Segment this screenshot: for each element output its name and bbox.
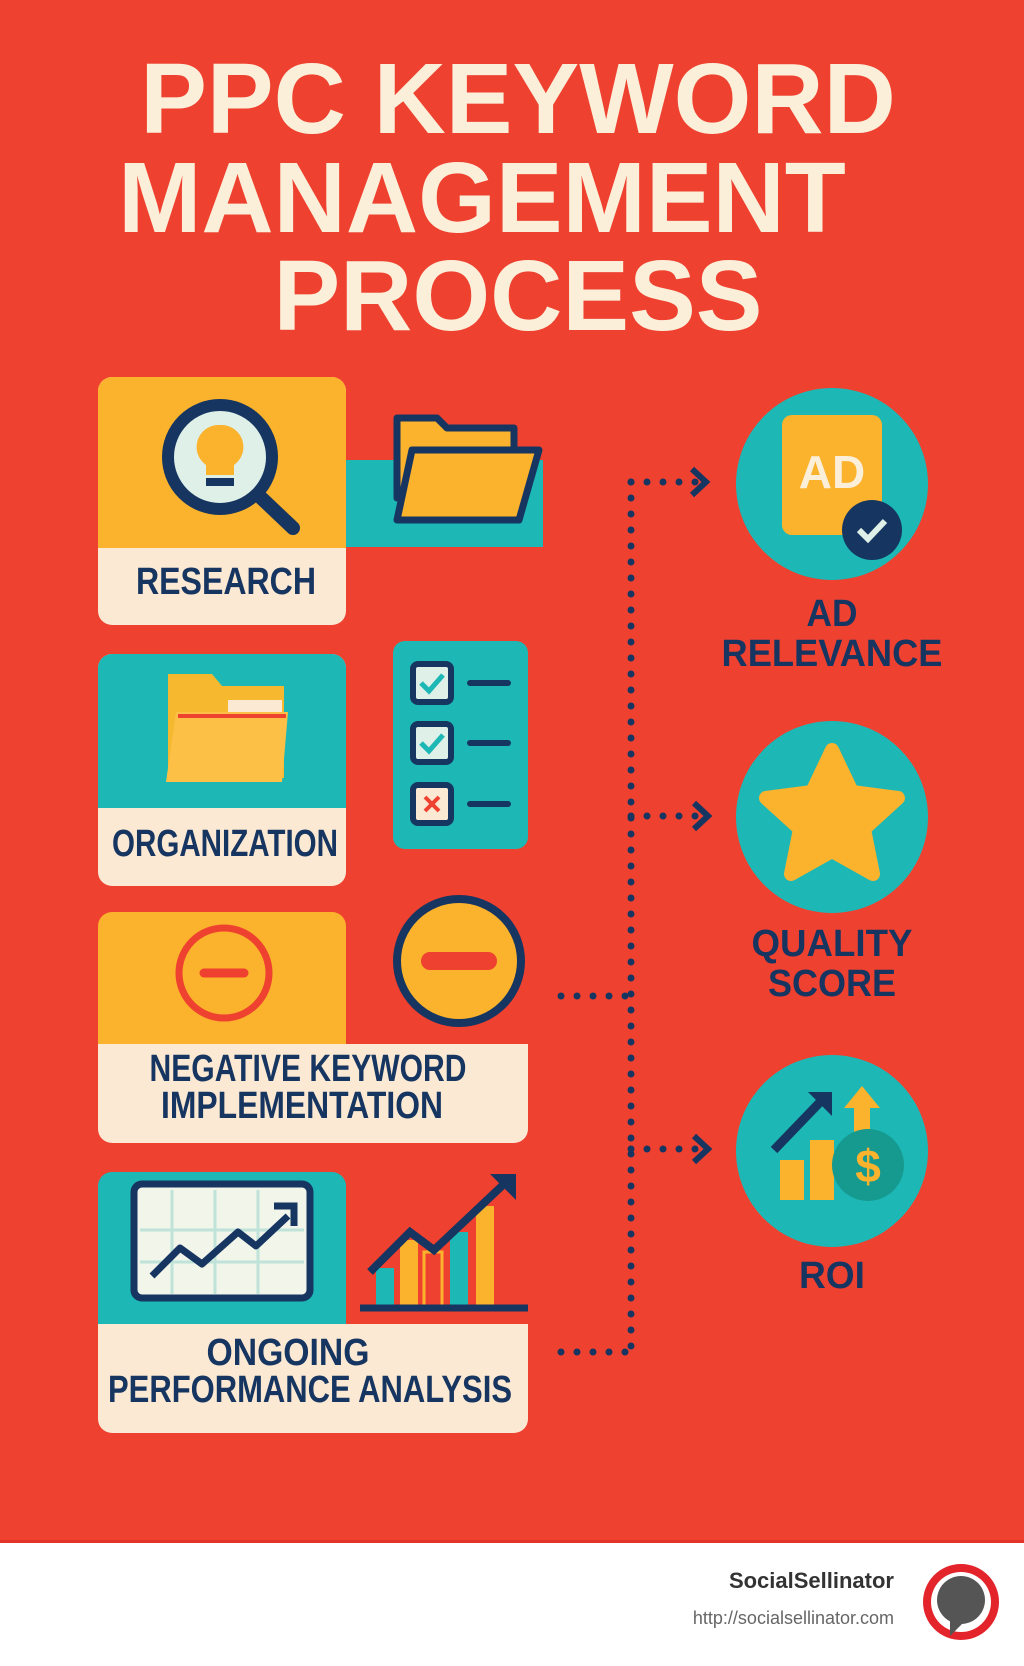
label: quality score: SCORE <box>768 963 896 1005</box>
icon: bar chart up <box>360 1174 528 1308</box>
footer brand text: http://socialsellinator.com <box>693 1608 894 1628</box>
label: organization: ORGANIZATION <box>112 823 338 865</box>
icon: folder <box>166 674 288 782</box>
icon: line chart <box>134 1184 310 1298</box>
icon: minus circle red <box>179 928 269 1018</box>
panel: organization <box>98 654 346 886</box>
label: negative keyword: NEGATIVE KEYWORD <box>150 1048 466 1090</box>
footer <box>0 1540 1024 1666</box>
label: quality score <box>752 923 912 1005</box>
icon: roi: $ <box>855 1140 881 1192</box>
label: ad relevance: RELEVANCE <box>722 633 942 675</box>
icon: ad relevance <box>736 388 928 580</box>
label: negative keyword <box>150 1048 466 1127</box>
label: ongoing: PERFORMANCE ANALYSIS <box>108 1369 512 1411</box>
footer brand text <box>693 1568 894 1628</box>
footer brand text: SocialSellinator <box>729 1568 894 1593</box>
title: MANAGEMENT <box>118 142 846 254</box>
icon: roi <box>736 1055 928 1247</box>
label: quality score: QUALITY <box>752 923 912 965</box>
panel: research <box>98 377 543 625</box>
title: PPC KEYWORD <box>140 43 896 155</box>
icon: checklist <box>393 641 528 849</box>
label: ongoing <box>108 1332 512 1411</box>
icon: ad relevance: AD <box>799 446 865 498</box>
label: ad relevance: AD <box>806 593 858 635</box>
title: PROCESS <box>273 240 763 352</box>
logo <box>923 1564 999 1640</box>
panel: negative keyword implementation <box>98 912 528 1143</box>
icon: minus circle <box>397 899 521 1023</box>
icon: quality score star <box>736 721 928 913</box>
panel: ongoing performance analysis <box>98 1172 528 1433</box>
icon: open folder <box>397 418 539 520</box>
label: ongoing: ONGOING <box>206 1332 370 1374</box>
title <box>118 43 896 352</box>
connector: dotted lines and arrows <box>561 469 708 1352</box>
icon: magnifier with bulb <box>168 405 293 528</box>
label: roi: ROI <box>799 1255 865 1297</box>
label: research: RESEARCH <box>136 561 316 603</box>
label: negative keyword: IMPLEMENTATION <box>161 1085 443 1127</box>
label: ad relevance <box>722 593 942 675</box>
